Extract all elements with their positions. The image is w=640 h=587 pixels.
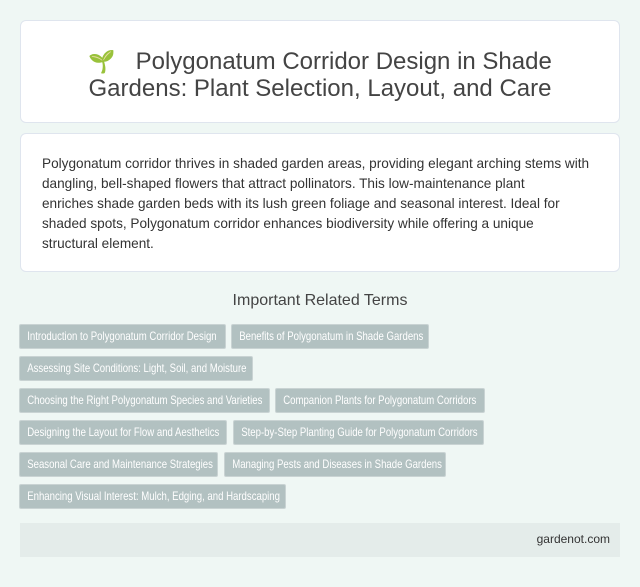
footer source text: gardenot.com [537,532,610,546]
header card [20,20,620,123]
description text: Polygonatum corridor thrives in shaded garden areas, providing elegant arching stems with [42,156,589,171]
tags: Step-by-Step Planting Guide for Polygonatum Corridors [241,425,478,439]
tags: Designing the Layout for Flow and Aesthetics [27,425,219,439]
tags: Managing Pests and Diseases in Shade Gardens [232,457,442,471]
description text [42,156,589,251]
tags: Choosing the Right Polygonatum Species and Varieties [27,393,262,407]
tags: Introduction to Polygonatum Corridor Design [27,329,217,343]
description text: shaded spots, Polygonatum corridor enhances biodiversity while offering a unique [42,216,534,231]
tags: Companion Plants for Polygonatum Corridors [283,393,476,407]
title: 🌱 Polygonatum Corridor Design in Shade Gardens: Plant Selection, Layout, and Care [88,48,552,102]
related terms heading: Important Related Terms [233,292,407,309]
tags: Benefits of Polygonatum in Shade Gardens [239,329,423,343]
tags: Seasonal Care and Maintenance Strategies [27,457,213,471]
description text: enriches shade garden beds with its lush green foliage and seasonal interest. Ideal for [42,196,560,211]
footer [20,523,620,557]
description card [20,133,620,272]
description text: dangling, bell-shaped flowers that attract pollinators. This low-maintenance plant [42,176,525,191]
tags: Assessing Site Conditions: Light, Soil, and Moisture [27,361,247,375]
description text: structural element. [42,236,154,251]
tags: Enhancing Visual Interest: Mulch, Edging, and Hardscaping [27,489,280,503]
